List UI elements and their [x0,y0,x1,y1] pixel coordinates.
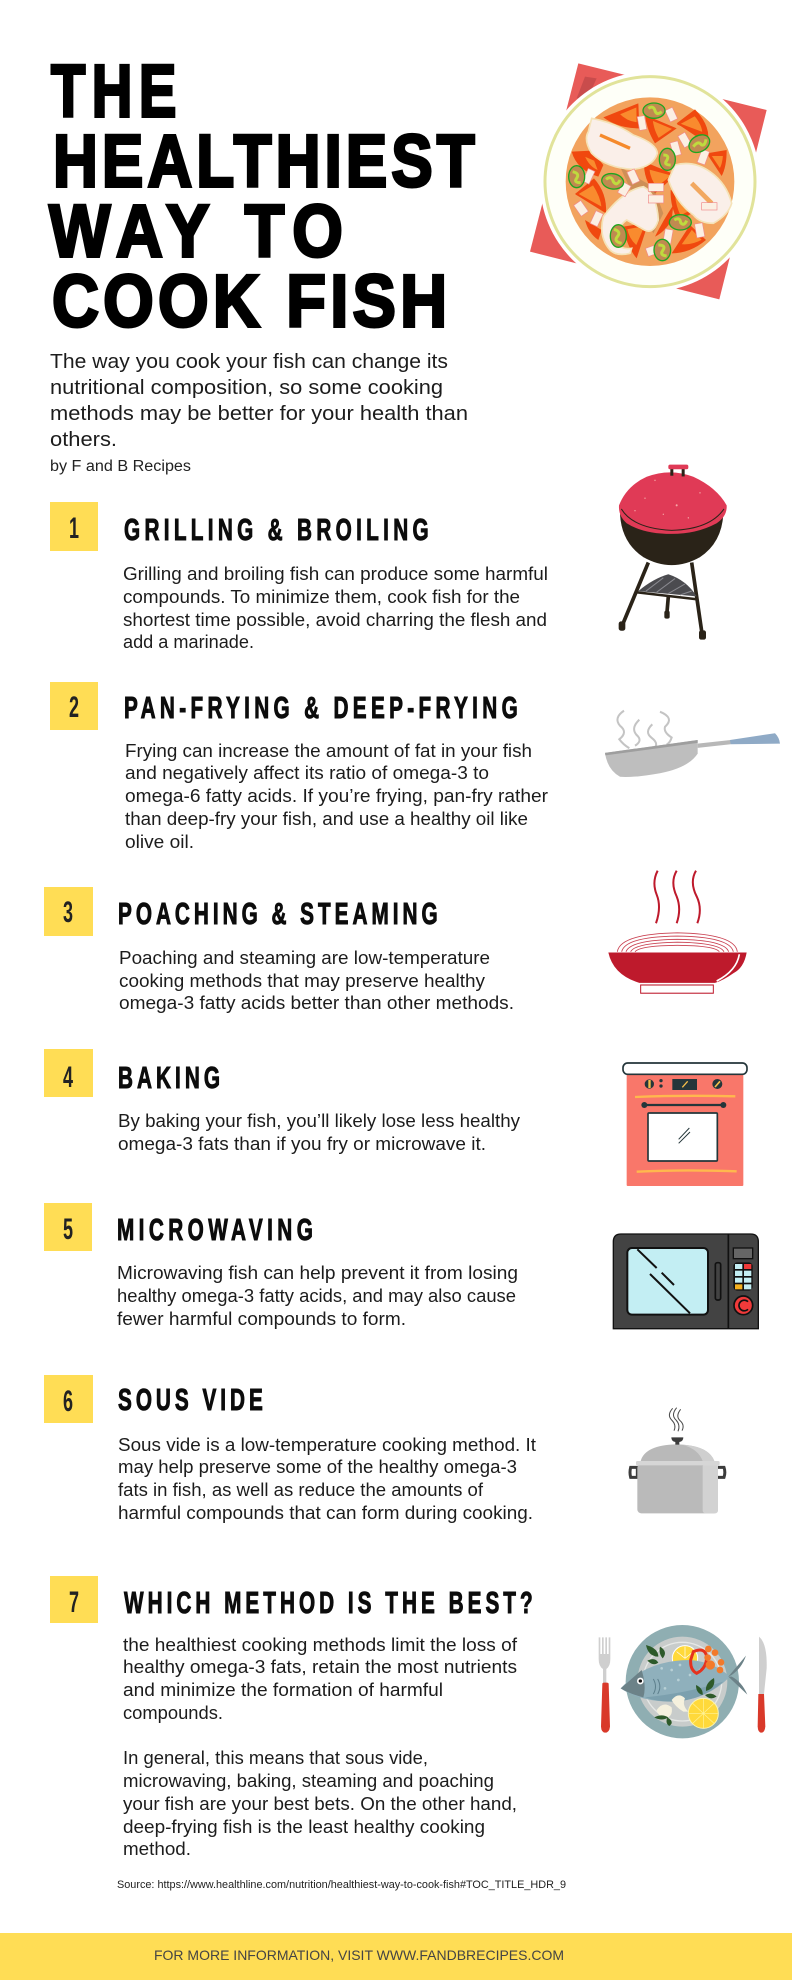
title [49,50,475,342]
heading: sous vide: SOUS VIDE [118,1382,263,1417]
body text: best methods: the healthiest cooking methods limit the loss of [123,1635,518,1655]
panel: step 3 poaching and steaming [44,871,747,1013]
body text: frying [125,741,548,852]
body text: poaching: omega-3 fatty acids better than other methods. [119,993,514,1013]
body text: microwaving: healthy omega-3 fatty acids, and may also cause [117,1286,516,1306]
panel: step 5 microwaving [44,1203,758,1329]
body text: grilling: Grilling and broiling fish can produce some harmful [123,564,548,584]
body text: frying: than deep-fry your fish, and use a healthy oil like [125,809,528,829]
body text: frying: Frying can increase the amount of fat in your fish [125,741,532,761]
heading: poaching and steaming: POACHING & STEAMING [118,896,438,931]
body text: sous vide: Sous vide is a low-temperature cooking method. It [118,1435,536,1455]
number badge 4: 4 [63,1062,73,1094]
heading: pan-frying and deep-frying: PAN-FRYING & DEEP-FRYING [124,690,518,725]
body text: sous vide: harmful compounds that can form during cooking. [118,1503,533,1523]
icon: steaming pot [630,1408,725,1513]
body text: grilling: compounds. To minimize them, cook fish for the [123,587,520,607]
intro text: nutritional composition, so some cooking [50,376,443,399]
number badge 2: 2 [69,692,79,724]
body text: poaching: Poaching and steaming are low-temperature [119,948,490,968]
body text: best methods: healthy omega-3 fats, retain the most nutrients [123,1657,517,1677]
body text: grilling: shortest time possible, avoid charring the flesh and [123,610,547,630]
body text: grilling [123,564,548,652]
body text: best methods: In general, this means that sous vide, [123,1748,428,1768]
body text: poaching: cooking methods that may preserve healthy [119,971,485,991]
panel: step 4 baking [44,1049,747,1186]
heading: baking: BAKING [118,1060,220,1095]
title: COOK FISH [52,260,447,342]
source line: Source: https://www.healthline.com/nutrition/healthiest-way-to-cook-fish#TOC_TITLE_HDR_9 [117,1879,566,1891]
intro text: methods may be better for your health than [50,402,468,425]
body text: baking: By baking your fish, you’ll likely lose less healthy [118,1111,520,1131]
number badge 6: 6 [63,1386,73,1418]
icon: frying pan with steam [605,711,780,777]
heading: microwaving: MICROWAVING [117,1212,313,1247]
number badge 7 [50,1576,98,1623]
icon: oven [623,1063,747,1186]
panel: step 2 pan-frying and deep-frying [50,682,780,852]
intro text: The way you cook your fish can change its [50,350,448,373]
body text: best methods: method. [123,1839,191,1859]
body text: best methods: compounds. [123,1703,223,1723]
number badge 5 [44,1203,92,1251]
body text: sous vide: fats in fish, as well as reduce the amounts of [118,1480,484,1500]
intro text: others. [50,428,117,451]
body text: microwaving: fewer harmful compounds to form. [117,1309,406,1329]
number badge 3: 3 [63,897,73,929]
number badge 4 [44,1049,93,1097]
panel: step 7 which method is the best [50,1576,767,1859]
byline: by F and B Recipes [50,458,191,475]
body text: microwaving [117,1263,518,1329]
icon: microwave [613,1234,758,1329]
icon: fish on plate with cutlery [599,1625,767,1738]
body text: baking: omega-3 fats than if you fry or microwave it. [118,1134,486,1154]
heading: grilling and broiling: GRILLING & BROILING [124,512,429,547]
title: HEALTHIEST [53,120,475,203]
body text: frying: omega-6 fatty acids. If you’re frying, pan-fry rather [125,786,548,806]
icon: steaming red bowl [608,871,747,993]
body text: best methods: microwaving, baking, steaming and poaching [123,1771,494,1791]
number badge 3 [44,887,93,936]
body text: sous vide: may help preserve some of the healthy omega-3 [118,1457,517,1477]
footer bar: FOR MORE INFORMATION, VISIT WWW.FANDBRECIPES.COM [154,1947,564,1963]
panel: step 6 sous vide [44,1375,725,1523]
number badge 1 [50,502,98,551]
body text: best methods: deep-frying fish is the least healthy cooking [123,1817,485,1837]
body text: grilling: add a marinade. [123,632,254,652]
number badge 1: 1 [69,513,79,545]
body text: sous vide [118,1435,536,1523]
body text: baking [118,1111,520,1154]
body text: frying: and negatively affect its ratio of omega-3 to [125,763,489,783]
number badge 7: 7 [69,1587,79,1619]
heading: which method is the best: WHICH METHOD IS THE BEST? [124,1585,533,1620]
title: WAY TO [49,190,343,272]
body text: frying: olive oil. [125,832,194,852]
number badge 6 [44,1375,93,1423]
body text: poaching [119,948,514,1013]
body text: best methods [123,1635,518,1859]
number badge 5: 5 [63,1214,73,1246]
icon: plate of fish and vegetables [530,63,767,299]
body text: best methods: your fish are your best bets. On the other hand, [123,1794,517,1814]
number badge 2 [50,682,98,730]
body text: best methods: and minimize the formation of harmful [123,1680,443,1700]
footer bar [0,1933,792,1980]
icon: charcoal grill [619,465,727,640]
intro text [50,350,468,451]
body text: microwaving: Microwaving fish can help prevent it from losing [117,1263,518,1283]
panel: step 1 grilling and broiling [50,465,727,652]
title: THE [51,50,176,132]
